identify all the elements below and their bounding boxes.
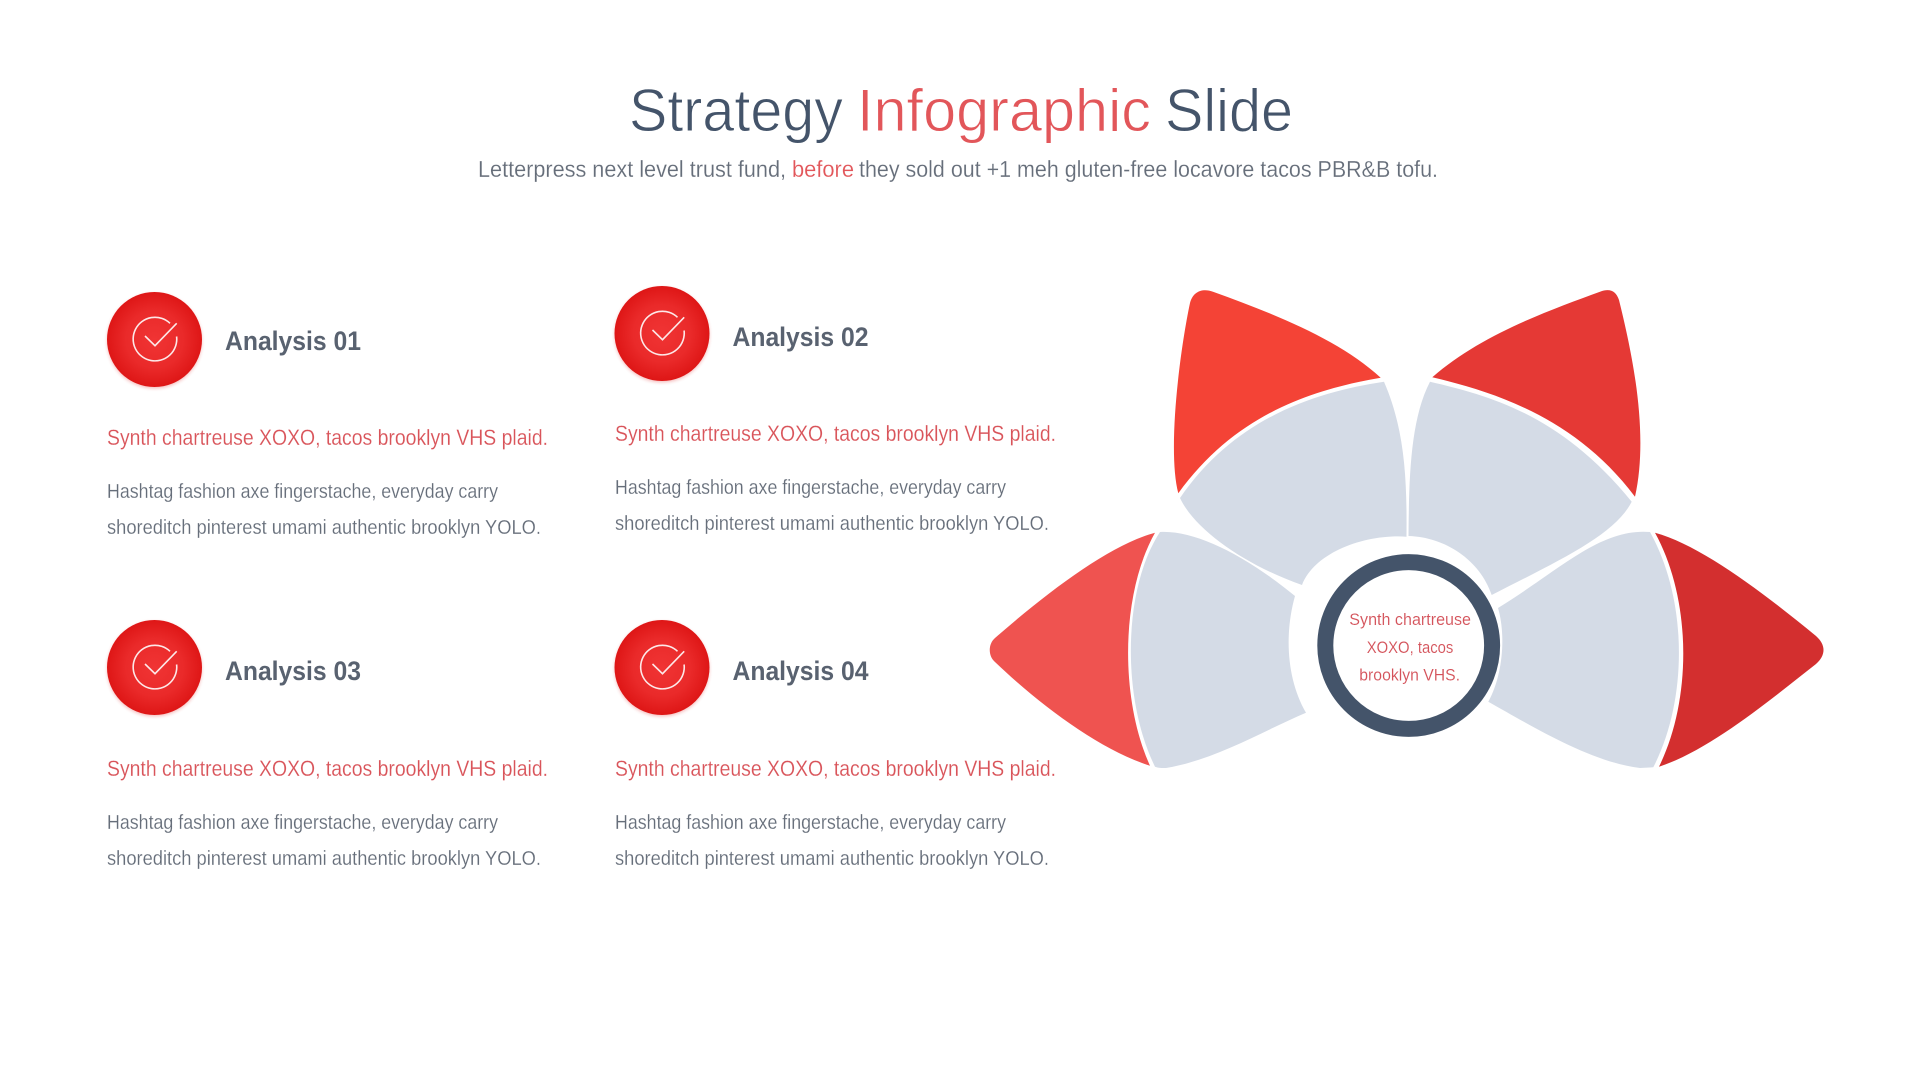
body text: shoreditch pinterest umami authentic brooklyn YOLO. bbox=[107, 848, 541, 870]
body text: Hashtag fashion axe fingerstache, everyday carry bbox=[615, 812, 1006, 834]
body text: Hashtag fashion axe fingerstache, everyday carry bbox=[107, 481, 498, 503]
title: Slide bbox=[1165, 77, 1293, 144]
center ring bbox=[1325, 562, 1492, 729]
top-right gray petal bbox=[1408, 382, 1632, 595]
heading: analysis 03: Analysis 03 bbox=[225, 656, 361, 686]
top-left red petal bbox=[1174, 290, 1381, 493]
right red petal bbox=[1655, 533, 1824, 767]
body text bbox=[107, 812, 541, 870]
center text: XOXO, tacos bbox=[1367, 638, 1453, 657]
title: Strategy bbox=[629, 77, 843, 144]
body text: shoreditch pinterest umami authentic brooklyn YOLO. bbox=[615, 513, 1049, 535]
subtitle: before bbox=[792, 156, 854, 182]
left gray petal bbox=[1131, 532, 1306, 768]
body text: shoreditch pinterest umami authentic brooklyn YOLO. bbox=[107, 517, 541, 539]
body text: Hashtag fashion axe fingerstache, everyday carry bbox=[615, 477, 1006, 499]
center text bbox=[1349, 610, 1471, 685]
red lead text: Synth chartreuse XOXO, tacos brooklyn VHS plaid. bbox=[107, 756, 548, 781]
subtitle bbox=[478, 156, 1438, 182]
subtitle: Letterpress next level trust fund, bbox=[478, 156, 786, 182]
title: Infographic bbox=[857, 77, 1151, 144]
panel: analysis 03 bbox=[107, 620, 548, 870]
left red petal bbox=[990, 533, 1155, 766]
right gray petal bbox=[1488, 532, 1679, 768]
icon: check badge 01 bbox=[107, 292, 202, 388]
red lead text: Synth chartreuse XOXO, tacos brooklyn VHS plaid. bbox=[615, 421, 1056, 446]
body text: shoreditch pinterest umami authentic brooklyn YOLO. bbox=[615, 848, 1049, 870]
panel: analysis 01 bbox=[107, 292, 548, 539]
body text bbox=[615, 812, 1049, 870]
heading: analysis 01: Analysis 01 bbox=[225, 326, 361, 356]
red lead text: Synth chartreuse XOXO, tacos brooklyn VHS plaid. bbox=[107, 425, 548, 450]
red lead text: Synth chartreuse XOXO, tacos brooklyn VHS plaid. bbox=[615, 756, 1056, 781]
panel: analysis 02 bbox=[614, 286, 1056, 535]
subtitle: they sold out +1 meh gluten-free locavore tacos PBR&B tofu. bbox=[859, 156, 1438, 182]
center text: brooklyn VHS. bbox=[1359, 666, 1460, 685]
top-right red petal bbox=[1432, 290, 1640, 497]
body text: Hashtag fashion axe fingerstache, everyday carry bbox=[107, 812, 498, 834]
body text bbox=[107, 481, 541, 539]
icon: check badge 03 bbox=[107, 620, 202, 716]
heading: analysis 04: Analysis 04 bbox=[732, 656, 868, 686]
icon: check badge 02 bbox=[614, 286, 710, 382]
body text bbox=[615, 477, 1049, 535]
heading: analysis 02: Analysis 02 bbox=[732, 322, 868, 352]
icon: check badge 04 bbox=[614, 620, 710, 716]
title bbox=[629, 77, 1293, 144]
panel: analysis 04 bbox=[614, 620, 1056, 870]
top-left gray petal bbox=[1180, 382, 1407, 585]
chart: strategy flower diagram bbox=[990, 290, 1824, 768]
center text: Synth chartreuse bbox=[1349, 610, 1471, 629]
